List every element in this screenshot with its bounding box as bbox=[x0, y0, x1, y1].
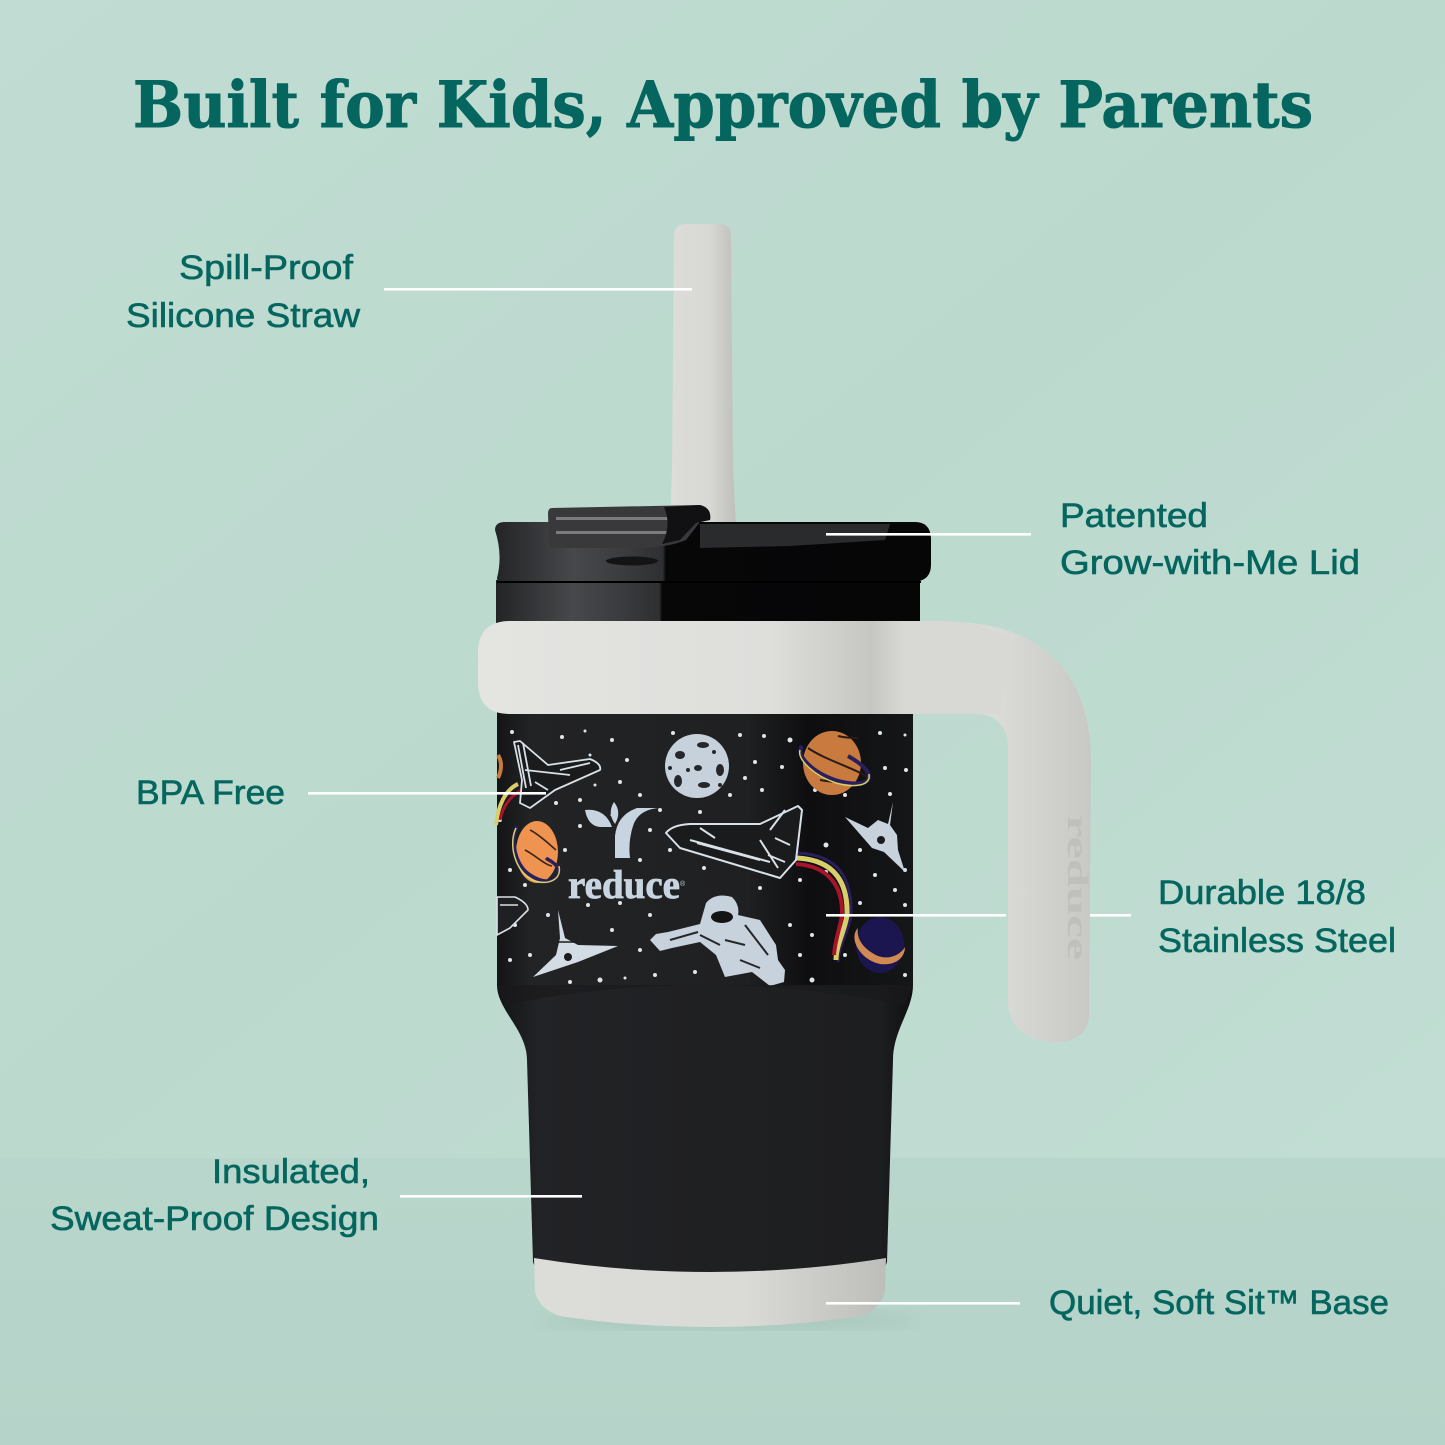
callout line: BPA bbox=[308, 792, 546, 795]
background floor bbox=[0, 1158, 1445, 1445]
callout: Spill-Proof Silicone Straw: Spill-Proof bbox=[179, 249, 354, 287]
callout: Patented Grow-with-Me Lid: Grow-with-Me Lid bbox=[1060, 544, 1360, 582]
neck ring bbox=[496, 580, 920, 630]
shuttle: lower left bbox=[497, 897, 528, 935]
astronaut bbox=[650, 895, 785, 986]
callout: Insulated, Sweat-Proof Design: Sweat-Proof Design bbox=[50, 1200, 379, 1238]
callout line: straw bbox=[384, 288, 692, 291]
callout: Durable 18/8 Stainless Steel: Stainless Steel bbox=[1158, 922, 1396, 960]
planet: dark with orange ring bbox=[854, 917, 905, 973]
space print panel bbox=[496, 712, 913, 986]
shuttle: centre bbox=[666, 806, 802, 878]
steel body bbox=[497, 700, 913, 1280]
shuttle: top left bbox=[514, 741, 600, 808]
shuttle: bottom bbox=[533, 910, 618, 977]
lid vent bbox=[606, 556, 658, 566]
title: Built for Kids, Approved by Parents bbox=[133, 68, 1313, 143]
straw bbox=[670, 224, 736, 525]
lid detail bbox=[700, 524, 890, 548]
handle bbox=[900, 622, 1091, 1042]
moon bbox=[665, 734, 729, 798]
rainbow trail: centre shuttle bbox=[796, 853, 851, 962]
callout: Durable 18/8 Stainless Steel bbox=[1158, 874, 1396, 960]
tab shadow bbox=[662, 505, 710, 544]
brand logo: reduce: ® bbox=[680, 880, 686, 888]
brand logo: reduce bbox=[568, 802, 686, 907]
callout line: base bbox=[826, 1302, 1020, 1305]
callout: Spill-Proof Silicone Straw: Silicone Straw bbox=[126, 297, 360, 335]
shuttle: right bbox=[845, 802, 905, 872]
brand logo: reduce: reduce bbox=[568, 862, 680, 907]
callout: Insulated, Sweat-Proof Design bbox=[50, 1153, 379, 1238]
floor shadow bbox=[540, 1311, 920, 1329]
icon: tumbler product illustration bbox=[478, 224, 1094, 1327]
callout line: steel bbox=[826, 914, 1131, 917]
callout: Insulated, Sweat-Proof Design: Insulated, bbox=[212, 1153, 370, 1191]
handle embossed logo: reduce bbox=[1061, 815, 1094, 960]
stars bbox=[498, 730, 908, 984]
planet: left orange bbox=[513, 821, 559, 883]
callout: BPA Free: BPA Free bbox=[136, 774, 285, 812]
callout line: insulated bbox=[400, 1195, 582, 1198]
planet trace: far left edge bbox=[498, 755, 501, 778]
callout: Spill-Proof Silicone Straw bbox=[126, 249, 360, 335]
rainbow trail: left shuttle bbox=[496, 784, 522, 825]
callout: Durable 18/8 Stainless Steel: Durable 18/8 bbox=[1158, 874, 1366, 912]
callout: Patented Grow-with-Me Lid bbox=[1060, 497, 1360, 582]
planet: top right orange bbox=[800, 731, 869, 795]
callout line: lid bbox=[826, 533, 1031, 536]
flip tab bbox=[548, 505, 710, 548]
silicone base bbox=[534, 1258, 886, 1327]
callout: Patented Grow-with-Me Lid: Patented bbox=[1060, 497, 1208, 535]
callout: Quiet, Soft Sit Base: Quiet, Soft Sit™ Base bbox=[1049, 1284, 1389, 1322]
handle band bbox=[478, 621, 1010, 714]
lid seam bbox=[497, 581, 921, 583]
tab highlight bbox=[556, 517, 692, 534]
bottom of print shading bbox=[497, 985, 913, 1005]
lid bbox=[495, 522, 931, 582]
